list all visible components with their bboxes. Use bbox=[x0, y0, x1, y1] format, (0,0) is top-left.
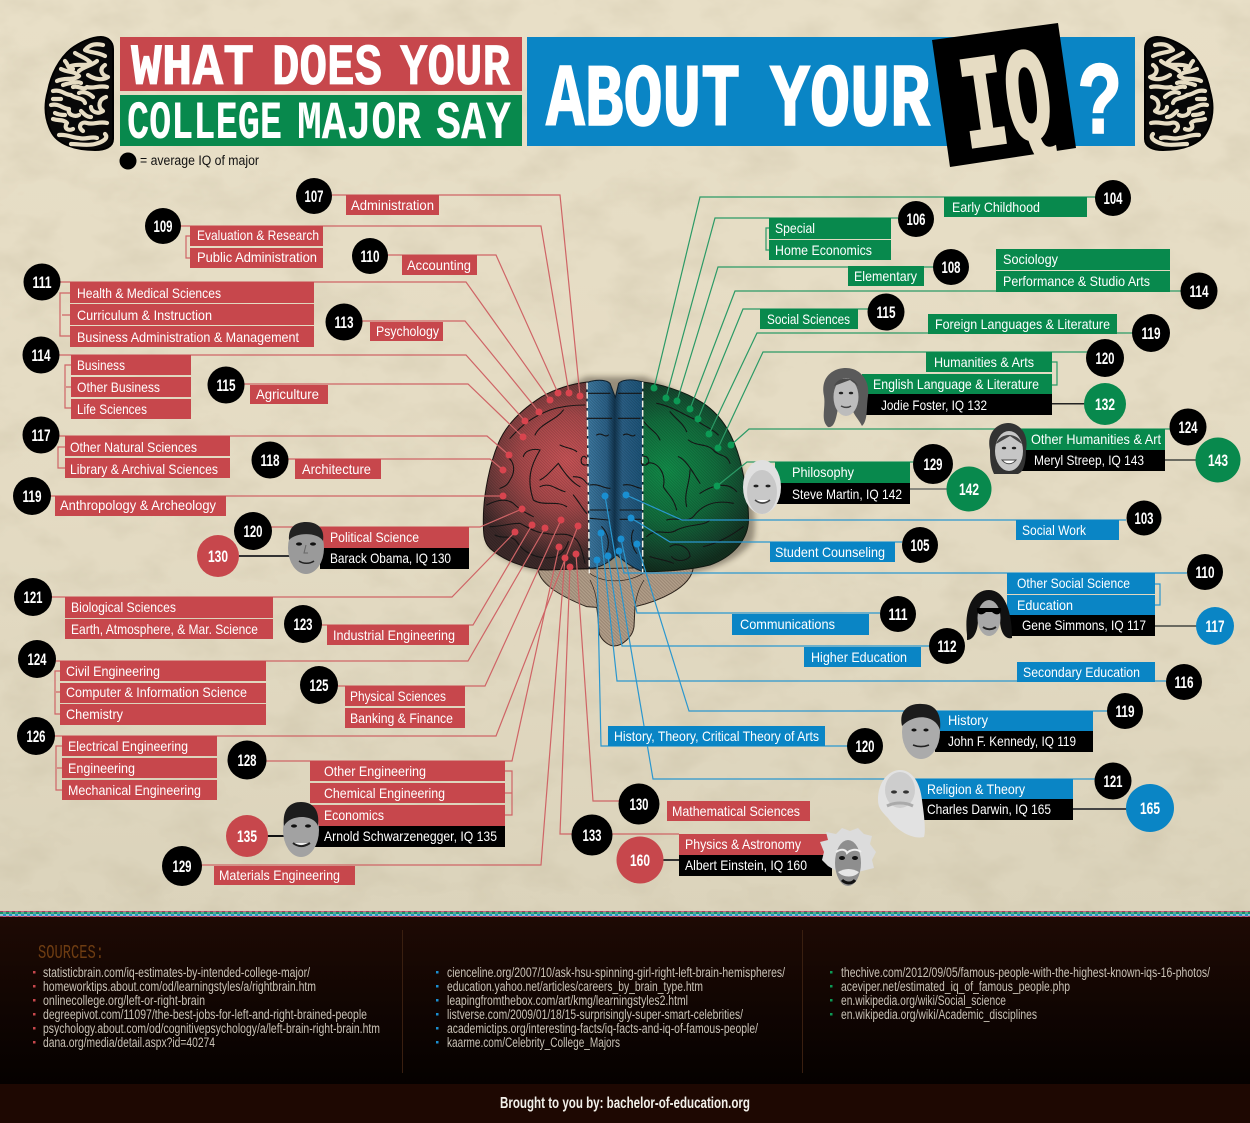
icon: face of Jodie Foster bbox=[823, 368, 868, 427]
label group: IQ 120 Jodie Foster: 132 bbox=[1095, 395, 1115, 414]
label group: IQ 107: Administration bbox=[351, 197, 434, 213]
sources column 2: academictips.org/interesting-facts/iq-facts-and-iq-of-famous-people/ bbox=[447, 1021, 758, 1036]
label group: IQ 116: Secondary Education bbox=[1023, 664, 1140, 680]
central brain illustration bbox=[483, 377, 755, 646]
label group: IQ 123: 123 bbox=[294, 615, 312, 634]
icon: face of Arnold Schwarzenegger bbox=[283, 802, 319, 857]
label group: IQ 103: Social Work bbox=[1022, 522, 1087, 538]
label group: IQ 119 John F. Kennedy: History bbox=[948, 712, 988, 728]
label group: IQ 121 Charles Darwin bbox=[878, 762, 1174, 838]
label group: IQ 129 Steve Martin bbox=[743, 444, 992, 514]
sources column 2: kaarme.com/Celebrity_College_Majors bbox=[447, 1035, 620, 1050]
label group: IQ 106: Home Economics bbox=[775, 242, 872, 258]
label group: IQ 109: 109 bbox=[154, 217, 172, 236]
label group: IQ 112: 112 bbox=[938, 637, 956, 656]
label group: IQ 110 Gene Simmons: 110 bbox=[1196, 563, 1214, 582]
label group: IQ 119 John F. Kennedy bbox=[901, 693, 1143, 759]
title line: About your IQ: ? bbox=[1078, 47, 1122, 165]
label group: IQ 108: 108 bbox=[942, 258, 960, 277]
label group: IQ 110 Gene Simmons: Education bbox=[1017, 597, 1073, 613]
label group: IQ 128 Arnold Schwarzenegger: Chemical Engineering bbox=[324, 785, 445, 801]
label group: IQ 114 left: Business bbox=[77, 357, 125, 373]
label group: IQ 120 Jodie Foster bbox=[823, 339, 1126, 427]
leader lines: left hemisphere bbox=[50, 195, 679, 865]
label group: IQ 119 right: 119 bbox=[1142, 324, 1160, 343]
label group: IQ 123: Industrial Engineering bbox=[333, 627, 455, 643]
title line: College major say: MAJOR bbox=[297, 94, 421, 155]
label group: IQ 121 Charles Darwin: Religion & Theory bbox=[927, 781, 1025, 797]
label group: IQ 118: 118 bbox=[260, 451, 280, 470]
label group: IQ 117 left: 117 bbox=[32, 426, 50, 445]
title banner bbox=[46, 23, 1212, 187]
sources column 3: en.wikipedia.org/wiki/Academic_disciplines bbox=[841, 1007, 1037, 1022]
sources column 1: statisticbrain.com/iq-estimates-by-intended-college-major/ bbox=[43, 965, 310, 980]
label group: IQ 114 right: Performance & Studio Arts bbox=[1003, 273, 1150, 289]
title line: About your IQ bbox=[527, 23, 1135, 187]
sources column 3: aceviper.net/estimated_iq_of_famous_people.php bbox=[841, 979, 1070, 994]
label group: IQ 129 materials: 129 bbox=[172, 857, 192, 876]
label group: IQ 130 math bbox=[618, 784, 810, 824]
label group: IQ 129 Steve Martin: Philosophy bbox=[792, 464, 854, 480]
label group: IQ 125: Physical Sciences bbox=[350, 688, 446, 704]
sulci bbox=[487, 393, 743, 563]
title line: College major say bbox=[120, 94, 522, 155]
label group: IQ 121 left: Biological Sciences bbox=[71, 599, 176, 615]
label group: IQ 126: Electrical Engineering bbox=[68, 738, 188, 754]
label group: IQ 117 left: Library & Archival Sciences bbox=[70, 461, 218, 477]
title line: What does your bbox=[120, 37, 522, 102]
label group: IQ 120 right: 120 bbox=[856, 737, 874, 756]
label group: IQ 105: Student Counseling bbox=[775, 544, 885, 560]
label group: IQ 126: Mechanical Engineering bbox=[68, 782, 201, 798]
icon: face of Albert Einstein bbox=[820, 828, 876, 886]
label group: IQ 117 left bbox=[22, 416, 230, 478]
sources column 1: degreepivot.com/11097/the-best-jobs-for-left-and-right-brained-people bbox=[43, 1007, 367, 1022]
label group: IQ 128 Arnold Schwarzenegger: Arnold Schwarzenegger, IQ 135 bbox=[324, 828, 497, 844]
label group: IQ 121 Charles Darwin: Charles Darwin, IQ 165 bbox=[927, 801, 1051, 817]
sources column 2: leapingfromthebox.com/art/kmg/learningstyles2.html bbox=[447, 993, 688, 1008]
sources column 2: cienceline.org/2007/10/ask-hsu-spinning-girl-right-left-brain-hemispheres/ bbox=[447, 965, 785, 980]
label group: IQ 112 bbox=[804, 628, 965, 667]
label group: IQ 114 left: 114 bbox=[32, 346, 51, 365]
mid dots bbox=[594, 492, 640, 564]
label group: IQ 121 left: 121 bbox=[24, 588, 42, 607]
label group: IQ 126 bbox=[17, 717, 217, 800]
label group: IQ 129 Steve Martin: 129 bbox=[924, 455, 942, 474]
label group: IQ 118: Architecture bbox=[302, 461, 371, 477]
label group: IQ 119 left: 119 bbox=[22, 487, 42, 506]
title line: What does your: WHAT bbox=[131, 37, 254, 102]
leader lines: midbrain bbox=[597, 495, 1187, 779]
left dots bbox=[500, 390, 584, 570]
label group: IQ 120 Barack Obama: Barack Obama, IQ 130 bbox=[330, 550, 451, 566]
leader lines: right hemisphere bbox=[654, 197, 1181, 486]
icon: face of Meryl Streep bbox=[989, 423, 1027, 474]
label group: IQ 124 Meryl Streep: Other Humanities & Art bbox=[1031, 431, 1161, 447]
label group: IQ 114 right: Sociology bbox=[1003, 251, 1058, 267]
label group: IQ 111: Curriculum & Instruction bbox=[77, 307, 212, 323]
panel: sources footer bbox=[0, 917, 1250, 1084]
label group: IQ 107 bbox=[296, 178, 439, 215]
label group: IQ 120 Jodie Foster: English Language & Literature bbox=[873, 376, 1039, 392]
label group: IQ 106 bbox=[769, 201, 934, 260]
label group: IQ 115 left: Agriculture bbox=[256, 386, 319, 402]
label group: IQ 120 Jodie Foster: 120 bbox=[1096, 349, 1114, 368]
sources column 2: listverse.com/2009/01/18/15-surprisingly-super-smart-celebrities/ bbox=[447, 1007, 743, 1022]
label group: IQ 106: 106 bbox=[906, 210, 926, 229]
label group: IQ 121 left: Earth, Atmosphere, & Mar. Science bbox=[71, 621, 258, 637]
title line: About your IQ: ABOUT bbox=[546, 51, 740, 152]
title line: About your IQ: YOUR bbox=[770, 51, 930, 152]
region dots bbox=[500, 384, 734, 570]
title line: What does your: DOES bbox=[272, 37, 382, 102]
label group: IQ 121 Charles Darwin: 165 bbox=[1140, 799, 1160, 818]
label group: IQ 105 bbox=[770, 527, 938, 563]
label group: IQ 114 left: Other Business bbox=[77, 379, 160, 395]
label group: IQ 128 Arnold Schwarzenegger: 128 bbox=[238, 751, 256, 770]
label group: IQ 124 Meryl Streep: 143 bbox=[1208, 451, 1228, 470]
label group: IQ 128 Arnold Schwarzenegger bbox=[226, 740, 505, 857]
credit bar bbox=[0, 1084, 1250, 1123]
label group: IQ 124 Meryl Streep: Meryl Streep, IQ 143 bbox=[1034, 452, 1144, 468]
icon: face of Charles Darwin bbox=[878, 770, 925, 838]
label group: IQ 124 left: 124 bbox=[28, 650, 47, 669]
sources column 1: psychology.about.com/od/cognitivepsychology/a/left-brain-right-brain.htm bbox=[43, 1021, 380, 1036]
label group: IQ 114 right bbox=[996, 249, 1218, 310]
label group: IQ 109: Public Administration bbox=[197, 249, 317, 265]
label group: IQ 114 left bbox=[22, 336, 191, 419]
label group: IQ 118 bbox=[252, 442, 381, 479]
label group: IQ 124 Meryl Streep: 124 bbox=[1178, 418, 1198, 437]
label group: IQ 115 right: 115 bbox=[876, 303, 896, 322]
divider dashes bbox=[587, 382, 643, 573]
label group: IQ 120 Barack Obama: Political Science bbox=[330, 529, 419, 545]
label group: IQ 121 Charles Darwin: 121 bbox=[1104, 772, 1122, 791]
label group: IQ 128 Arnold Schwarzenegger: Economics bbox=[324, 807, 384, 823]
label group: IQ 116: 116 bbox=[1174, 673, 1194, 692]
label group: IQ 115 left bbox=[208, 366, 328, 404]
label group: IQ 115 right: Social Sciences bbox=[767, 311, 850, 327]
right hemisphere bbox=[643, 382, 748, 572]
label group: IQ 125: Banking & Finance bbox=[350, 710, 453, 726]
label group: IQ 111 bbox=[24, 264, 314, 347]
label group: IQ 133 Albert Einstein bbox=[572, 814, 876, 886]
label group: IQ 109 bbox=[145, 208, 323, 268]
title line: College major say: COLLEGE bbox=[127, 94, 282, 155]
sources heading: SOURCES: bbox=[38, 942, 104, 964]
decorative strip bbox=[0, 911, 1250, 917]
label group: IQ 120 Barack Obama: 120 bbox=[244, 522, 262, 541]
label group: IQ 123 bbox=[284, 605, 469, 645]
label group: IQ 120 Jodie Foster: Humanities & Arts bbox=[934, 354, 1034, 370]
label group: IQ 115 right bbox=[760, 294, 904, 330]
credit bar: Brought to you by: bachelor-of-education.org bbox=[500, 1095, 750, 1112]
label group: IQ 124 left: Civil Engineering bbox=[66, 663, 160, 679]
label group: IQ 121 left bbox=[14, 578, 273, 639]
label group: IQ 130 math: Mathematical Sciences bbox=[672, 803, 800, 819]
label group: IQ 113: Psychology bbox=[376, 323, 439, 339]
sources column 2: education.yahoo.net/articles/careers_by_brain_type.htm bbox=[447, 979, 703, 994]
label group: IQ 108: Elementary bbox=[854, 268, 917, 284]
label group: IQ 124 left: Chemistry bbox=[66, 706, 123, 722]
label group: IQ 119 John F. Kennedy: 119 bbox=[1116, 702, 1134, 721]
label group: IQ 133 Albert Einstein: 160 bbox=[630, 851, 650, 870]
sources column 1: onlinecollege.org/left-or-right-brain bbox=[43, 993, 205, 1008]
title line: College major say: SAY bbox=[436, 94, 511, 155]
label group: IQ 124 left bbox=[18, 640, 266, 725]
label group: IQ 119 right: Foreign Languages & Literature bbox=[935, 316, 1110, 332]
label group: IQ 120 right bbox=[608, 726, 883, 764]
label group: IQ 107: 107 bbox=[304, 187, 324, 206]
label group: IQ 129 materials bbox=[162, 846, 355, 886]
sources column 1: dana.org/media/detail.aspx?id=40274 bbox=[43, 1035, 215, 1050]
label group: IQ 119 John F. Kennedy: John F. Kennedy, IQ 119 bbox=[948, 733, 1076, 749]
label group: IQ 130 math: 130 bbox=[630, 795, 648, 814]
label group: IQ 125 bbox=[300, 666, 465, 728]
label group: IQ 120 Barack Obama: 130 bbox=[208, 547, 228, 566]
label group: IQ 129 materials: Materials Engineering bbox=[219, 867, 340, 883]
icon: face of Steve Martin bbox=[743, 460, 781, 514]
right dots bbox=[650, 384, 734, 490]
label group: IQ 115 left: 115 bbox=[216, 376, 236, 395]
label group: IQ 129 Steve Martin: Steve Martin, IQ 142 bbox=[792, 486, 902, 502]
label group: IQ 111: Health & Medical Sciences bbox=[77, 285, 221, 301]
sources column 3: en.wikipedia.org/wiki/Social_science bbox=[841, 993, 1006, 1008]
label group: IQ 105: 105 bbox=[910, 536, 930, 555]
label group: IQ 120 Barack Obama bbox=[197, 512, 469, 577]
sources column 1: homeworktips.about.com/od/learningstyles/a/rightbrain.htm bbox=[43, 979, 316, 994]
label group: IQ 129 Steve Martin: 142 bbox=[959, 480, 979, 499]
label group: IQ 108 bbox=[848, 249, 969, 286]
label group: IQ 119 left bbox=[13, 477, 226, 516]
label group: IQ 112: Higher Education bbox=[811, 649, 907, 665]
sources column 3 bbox=[830, 965, 1210, 1022]
label group: IQ 110: 110 bbox=[360, 247, 380, 266]
label group: IQ 103: 103 bbox=[1134, 509, 1154, 528]
legend: = average IQ of major bbox=[140, 153, 259, 168]
label group: IQ 104 bbox=[944, 180, 1131, 217]
label group: IQ 120 Jodie Foster: Jodie Foster, IQ 132 bbox=[881, 397, 987, 413]
icon: left brain bbox=[46, 37, 113, 150]
left hemisphere bbox=[483, 382, 590, 570]
label group: IQ 119 left: Anthropology & Archeology bbox=[60, 497, 216, 513]
label group: IQ 119 right bbox=[928, 314, 1170, 352]
label group: IQ 104: Early Childhood bbox=[952, 199, 1040, 215]
sources column 2 bbox=[436, 965, 785, 1050]
label group: IQ 111 right: Communications bbox=[740, 616, 835, 632]
label group: IQ 111: 111 bbox=[32, 273, 52, 292]
sources column 1 bbox=[33, 965, 380, 1050]
label group: IQ 128 Arnold Schwarzenegger: 135 bbox=[237, 827, 257, 846]
label group: IQ 114 right: 114 bbox=[1190, 282, 1209, 301]
icon: face of Gene Simmons bbox=[966, 590, 1012, 640]
label group: IQ 133 Albert Einstein: 133 bbox=[582, 826, 602, 845]
label group: IQ 106: Special bbox=[775, 220, 815, 236]
label group: IQ 110 Gene Simmons bbox=[966, 554, 1234, 645]
midbrain bbox=[587, 380, 643, 572]
title line: What does your: YOUR bbox=[400, 37, 510, 102]
label group: IQ 111 right bbox=[732, 596, 916, 635]
label group: IQ 128 Arnold Schwarzenegger: Other Engineering bbox=[324, 763, 426, 779]
label group: IQ 125: 125 bbox=[310, 676, 328, 695]
label group: IQ 126: 126 bbox=[26, 727, 46, 746]
label group: IQ 126: Engineering bbox=[68, 760, 135, 776]
icon: face of John F. Kennedy bbox=[901, 704, 940, 759]
label group: IQ 124 Meryl Streep bbox=[989, 408, 1240, 482]
cerebellum and brain stem bbox=[538, 567, 693, 646]
label group: IQ 109: Evaluation & Research bbox=[197, 227, 319, 243]
label group: IQ 111 right: 111 bbox=[888, 605, 908, 624]
label group: IQ 116 bbox=[1017, 662, 1202, 700]
icon: right brain bbox=[1145, 37, 1212, 150]
label group: IQ 124 left: Computer & Information Science bbox=[66, 684, 247, 700]
label group: IQ 104: 104 bbox=[1104, 189, 1123, 208]
label group: IQ 110 Gene Simmons: 117 bbox=[1206, 617, 1224, 636]
label group: IQ 133 Albert Einstein: Albert Einstein, IQ 160 bbox=[685, 857, 807, 873]
icon: face of Barack Obama bbox=[288, 522, 324, 574]
label group: IQ 110 Gene Simmons: Gene Simmons, IQ 117 bbox=[1022, 617, 1146, 633]
label group: IQ 133 Albert Einstein: Physics & Astronomy bbox=[685, 836, 801, 852]
label group: IQ 114 left: Life Sciences bbox=[77, 401, 147, 417]
label group: IQ 113: 113 bbox=[334, 313, 354, 332]
label group: IQ 103 bbox=[1016, 500, 1162, 540]
label group: IQ 110 Gene Simmons: Other Social Science bbox=[1017, 575, 1130, 591]
title line: About your IQ: IQ bbox=[952, 26, 1062, 187]
label group: IQ 120 right: History, Theory, Critical Theory of Arts bbox=[614, 728, 819, 744]
label group: IQ 110: Accounting bbox=[407, 257, 471, 273]
label group: IQ 110 bbox=[352, 238, 477, 275]
label group: IQ 113 bbox=[326, 304, 443, 341]
label group: IQ 117 left: Other Natural Sciences bbox=[70, 439, 197, 455]
label group: IQ 111: Business Administration & Management bbox=[77, 329, 299, 345]
